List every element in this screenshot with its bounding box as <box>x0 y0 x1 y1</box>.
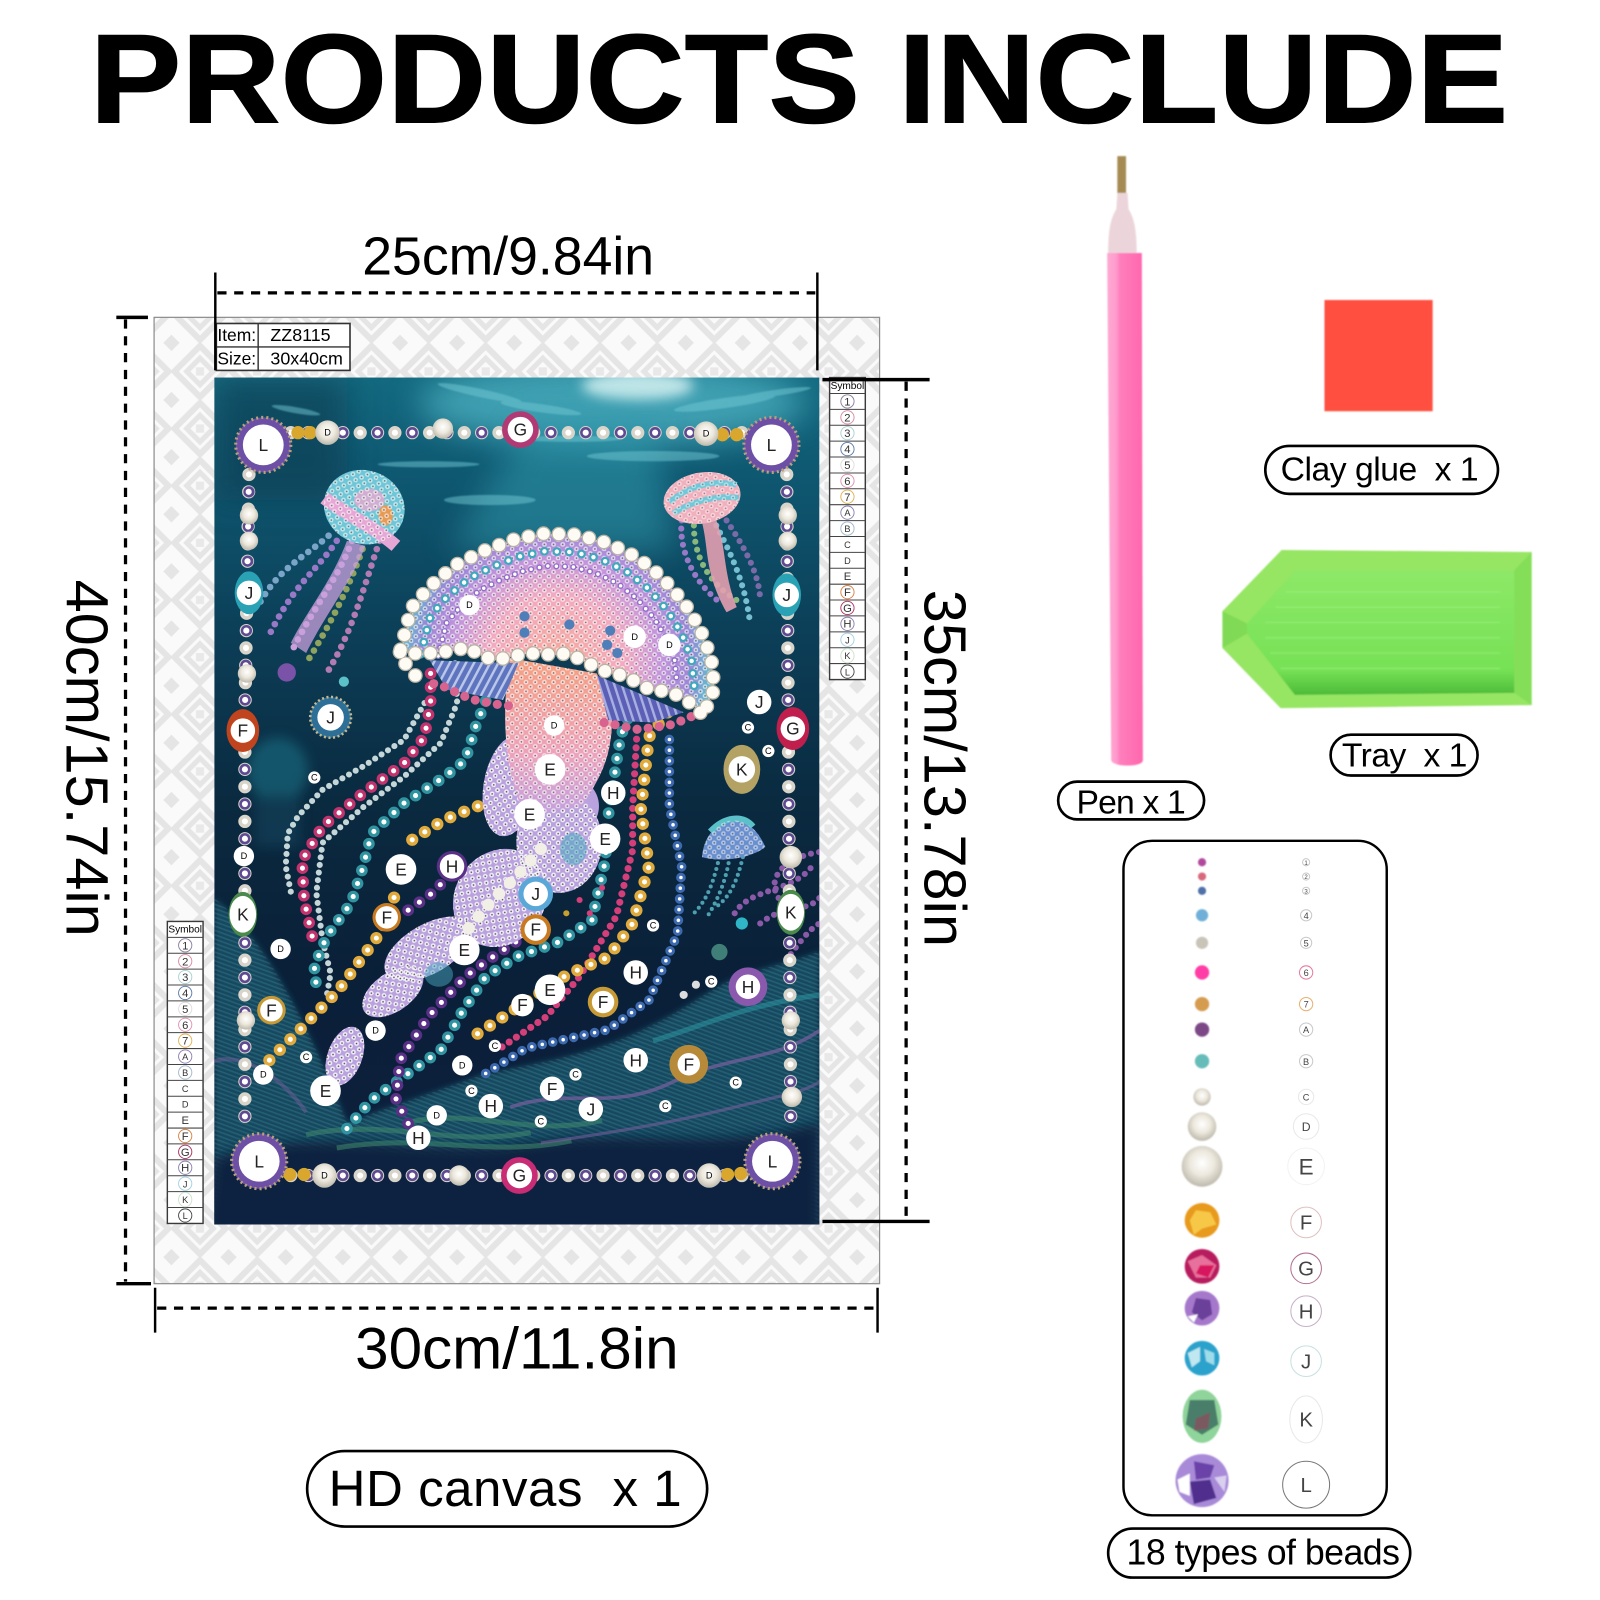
bead labels on canvas: J <box>586 1099 595 1119</box>
bead labels on canvas: D <box>321 1171 328 1181</box>
bead symbols: 4 <box>1304 911 1309 921</box>
bead labels on canvas: D <box>631 632 638 642</box>
symbol table: right: 2 <box>844 412 851 424</box>
bead symbols: D <box>1302 1120 1311 1134</box>
label: HD canvas: HD canvas x 1 <box>329 1460 682 1517</box>
dimension: bottom width 30cm: 30cm/11.8in <box>355 1316 679 1381</box>
main jellyfish tentacles <box>269 663 682 1129</box>
bead labels on canvas: D <box>260 1070 267 1080</box>
bead labels on canvas: E <box>524 804 535 824</box>
bead labels on canvas: E <box>544 760 556 780</box>
bead labels on canvas: H <box>629 963 642 983</box>
symbol table: right: E <box>844 571 851 583</box>
label: pen <box>1058 782 1204 821</box>
canvas patterned border <box>154 317 880 1284</box>
background jellyfish: dim <box>247 738 308 847</box>
symbol table: right: 7 <box>844 492 851 504</box>
bead labels on canvas: D <box>706 1171 713 1181</box>
main jellyfish bell <box>400 534 714 730</box>
symbol table: left: B <box>182 1068 188 1078</box>
symbol table: right: 4 <box>844 444 851 456</box>
bead labels on canvas: L <box>254 1151 264 1171</box>
bead labels on canvas: K <box>237 904 249 924</box>
symbol table: right: A <box>844 508 851 518</box>
bead labels on canvas: C <box>650 921 657 931</box>
item and size table <box>216 323 350 370</box>
symbol table: left: 1 <box>182 940 188 952</box>
symbol table: right: F <box>844 587 851 599</box>
bead labels on canvas: E <box>320 1081 331 1101</box>
symbol table: right: 5 <box>844 460 851 472</box>
symbol table: right: L <box>845 667 850 677</box>
symbol table: right: J <box>845 635 850 645</box>
bead labels on canvas: C <box>303 1052 310 1062</box>
symbol table: left: D <box>182 1100 189 1110</box>
bead labels on canvas: C <box>708 977 715 987</box>
symbol table: right: 1 <box>844 397 851 409</box>
bead labels on canvas: F <box>683 1054 694 1074</box>
bead labels on canvas: L <box>768 1151 778 1171</box>
symbol table: left: H <box>181 1162 189 1174</box>
bead symbols: 3 <box>1304 888 1308 895</box>
bead labels on canvas: D <box>372 1026 379 1036</box>
symbol table: left: F <box>182 1131 189 1143</box>
symbol table: left: Symbol <box>168 925 202 936</box>
label: clay glue: Clay glue x 1 <box>1281 452 1479 489</box>
label: bead types: 18 types of beads <box>1127 1532 1400 1572</box>
bead labels on canvas: K <box>785 902 797 922</box>
bead symbols: 7 <box>1304 1000 1309 1010</box>
bead labels on canvas: E <box>544 980 556 1000</box>
bead labels on canvas: J <box>782 585 791 605</box>
bead labels on canvas: J <box>326 707 335 727</box>
dimension: left height 40cm: 40cm/15.74in <box>53 580 120 937</box>
main jellyfish oral arms <box>318 658 612 1091</box>
bead labels on canvas: E <box>459 940 470 960</box>
artwork: jellyfish painting <box>204 360 819 1235</box>
bead labels on canvas: D <box>277 944 284 954</box>
bead labels on canvas: F <box>266 1000 277 1020</box>
item and size table: 30x40cm <box>270 348 343 368</box>
dimension: right height 35cm <box>822 380 978 1221</box>
bead labels on canvas: D <box>466 600 473 610</box>
dimension: top width 25cm <box>215 226 817 370</box>
loose beads <box>278 663 748 999</box>
symbol table: left: K <box>182 1195 189 1205</box>
bead labels on canvas: K <box>736 760 748 780</box>
bead labels on canvas: H <box>446 856 458 876</box>
coloured rhinestone rims <box>227 411 809 1194</box>
dimension: left height 40cm <box>53 317 151 1284</box>
symbol table: left: 4 <box>182 988 188 1000</box>
bead labels on canvas: L <box>767 435 777 455</box>
bead labels on canvas: J <box>755 692 764 712</box>
symbol table: left: J <box>183 1179 188 1189</box>
bead symbols: G <box>1298 1259 1314 1281</box>
panel: bead chart <box>1123 841 1387 1515</box>
bead labels on canvas: C <box>311 773 318 783</box>
title: PRODUCTS INCLUDE <box>90 7 1508 149</box>
bead symbols: 2 <box>1304 874 1308 881</box>
bead labels on canvas: C <box>662 1101 669 1111</box>
bead symbols: H <box>1299 1301 1313 1323</box>
bead labels on canvas: E <box>599 829 611 849</box>
bead labels on canvas: H <box>485 1096 497 1116</box>
bead labels on canvas: J <box>531 884 540 904</box>
item and size table: Item: <box>217 325 256 345</box>
label: clay glue <box>1265 446 1498 494</box>
bead symbols: A <box>1303 1025 1310 1035</box>
dimension: bottom width 30cm <box>155 1288 878 1381</box>
bead symbols: 5 <box>1304 938 1309 948</box>
small jellyfish: top right <box>659 466 760 622</box>
bead labels on canvas: L <box>258 435 268 455</box>
bead labels on canvas <box>227 411 809 1194</box>
bead symbols: C <box>1303 1093 1310 1103</box>
bead labels on canvas: F <box>547 1079 557 1099</box>
bead symbols: 1 <box>1304 860 1308 867</box>
bead labels on canvas: F <box>598 992 608 1012</box>
symbol table: right: H <box>843 619 852 631</box>
bead labels on canvas: C <box>745 723 752 733</box>
symbol table: right: K <box>844 651 851 661</box>
symbol table: left: 3 <box>182 972 188 984</box>
symbol table: left: 2 <box>182 956 188 968</box>
symbol table: left: 7 <box>182 1036 188 1048</box>
bead labels on canvas: G <box>513 1166 526 1186</box>
symbol table: right: G <box>843 603 852 615</box>
bead labels on canvas: C <box>538 1116 545 1126</box>
bead symbols <box>1283 859 1330 1508</box>
icon: clay glue <box>1324 300 1433 411</box>
bead labels on canvas: C <box>765 746 772 756</box>
item and size table: Size: <box>217 348 256 368</box>
bead labels on canvas: C <box>492 1041 499 1051</box>
label: HD canvas <box>307 1451 707 1527</box>
dimension: right height 35cm: 35cm/13.78in <box>911 590 978 947</box>
bead labels on canvas: G <box>786 719 800 739</box>
bead labels on canvas: H <box>607 783 620 803</box>
bead labels on canvas: D <box>703 429 710 439</box>
symbol table: right: 6 <box>844 476 851 488</box>
symbol table: right: D <box>844 556 851 566</box>
label: tray: Tray x 1 <box>1342 737 1467 774</box>
symbol table: left: 6 <box>182 1020 188 1032</box>
symbol table: left: G <box>181 1147 190 1159</box>
small jellyfish: top left <box>260 470 405 673</box>
dimension: top width 25cm: 25cm/9.84in <box>362 226 654 286</box>
bead labels on canvas: D <box>324 428 331 438</box>
symbol table: right <box>830 378 865 680</box>
panel: canvas <box>154 317 880 1284</box>
bead labels on canvas: H <box>629 1050 642 1070</box>
bead symbols: J <box>1301 1351 1311 1373</box>
bead symbols: L <box>1300 1475 1312 1497</box>
symbol table: right: C <box>844 540 851 550</box>
purple coral <box>735 852 819 954</box>
bead labels on canvas: D <box>433 1110 440 1120</box>
bead symbols: K <box>1299 1410 1313 1432</box>
bead labels on canvas: F <box>381 907 392 927</box>
bead labels on canvas: E <box>395 860 407 880</box>
symbol table: right: 3 <box>844 428 851 440</box>
bead symbols: 6 <box>1304 968 1309 978</box>
item and size table: ZZ8115 <box>270 325 331 345</box>
bead labels on canvas: F <box>238 721 248 741</box>
bead labels on canvas: C <box>732 1078 739 1088</box>
symbol table: left: L <box>183 1211 188 1221</box>
small jellyfish: lower right <box>694 819 765 918</box>
bead labels on canvas: F <box>517 995 528 1015</box>
bead symbols: F <box>1300 1213 1312 1235</box>
bead labels on canvas: D <box>459 1060 466 1070</box>
symbol table: left: A <box>182 1052 189 1062</box>
seabed waves <box>204 898 819 1235</box>
icon: tray <box>1222 550 1532 708</box>
bead labels on canvas: C <box>468 1086 475 1096</box>
symbol table: left <box>167 921 203 1223</box>
symbol table: left: C <box>182 1084 189 1094</box>
bead labels on canvas: C <box>572 1070 579 1080</box>
bead labels on canvas: D <box>241 851 248 861</box>
bead labels on canvas: H <box>742 977 754 997</box>
bead labels on canvas: F <box>530 920 541 940</box>
bead symbols: B <box>1303 1057 1309 1067</box>
label: pen: Pen x 1 <box>1077 784 1186 821</box>
symbol table: right: B <box>844 524 851 534</box>
corner rhinestones <box>232 417 800 1189</box>
bead swatches <box>1176 858 1229 1507</box>
bead labels on canvas: J <box>245 583 253 603</box>
bead labels on canvas: H <box>412 1128 425 1148</box>
symbol table: left: E <box>181 1115 189 1127</box>
bead labels on canvas: D <box>666 640 673 650</box>
symbol table: right: Symbol <box>831 381 864 392</box>
icon: pen <box>1107 156 1143 766</box>
symbol table: left: 5 <box>182 1004 188 1016</box>
bead labels on canvas: G <box>514 420 527 440</box>
bead symbols: E <box>1299 1154 1314 1179</box>
bell bead rows <box>421 551 694 686</box>
bead labels on canvas: D <box>551 721 558 731</box>
border bead chains <box>237 418 802 1188</box>
